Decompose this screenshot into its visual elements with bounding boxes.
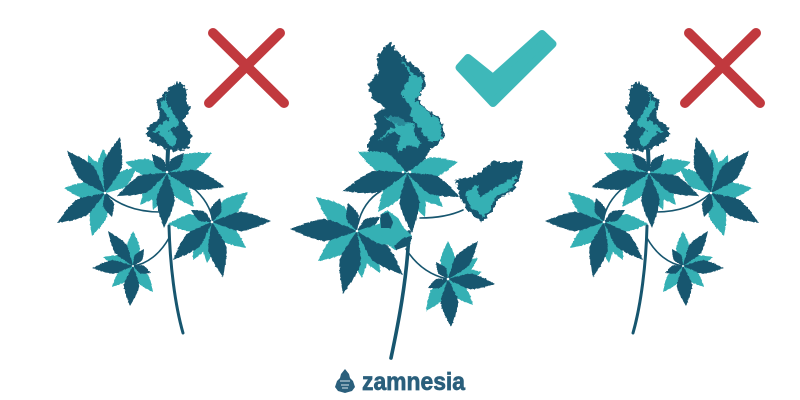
leaves [290,142,496,328]
right plant: mirrored, marked wrong [545,81,764,333]
logo: zamnesia [335,368,466,396]
icon: red cross right [685,33,760,103]
main bud [367,42,445,172]
logo icon [335,369,355,393]
small lower bud [380,210,412,250]
side bud [455,161,523,222]
leaves [52,134,271,307]
left plant: small buds, marked wrong [52,81,271,333]
icon: teal check mark [460,34,552,103]
bud [146,81,192,152]
icon: red cross left [209,33,284,103]
logo wordmark: zamnesia [362,368,466,396]
center plant: large buds, marked correct [290,42,523,358]
